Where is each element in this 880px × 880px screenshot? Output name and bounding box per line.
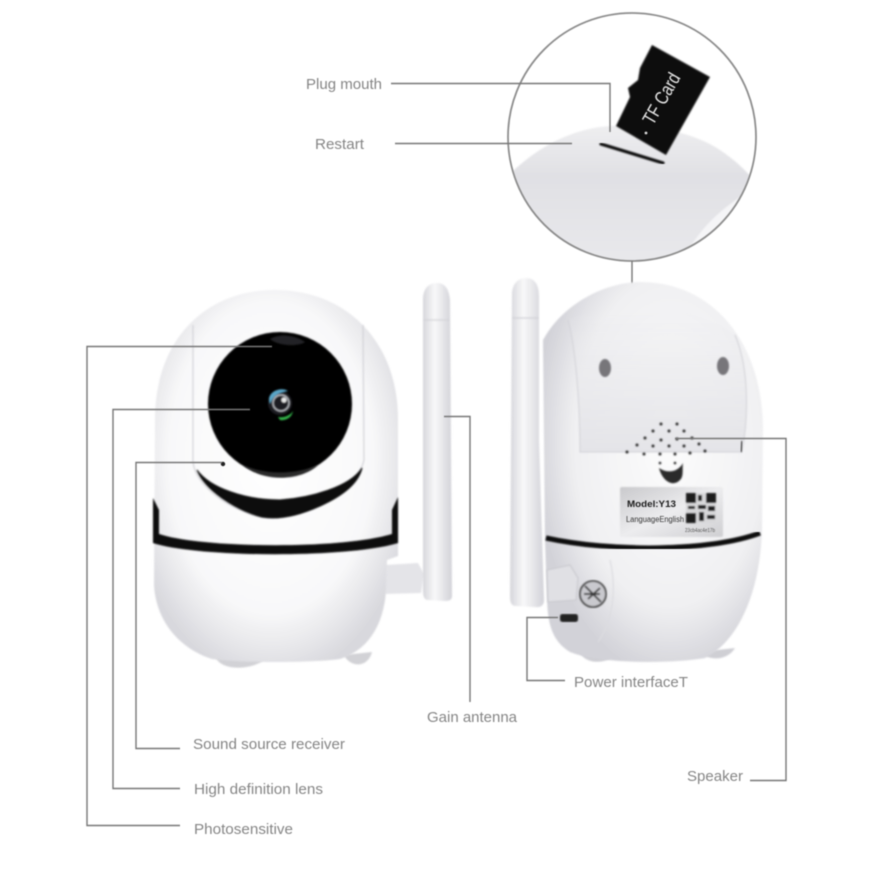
model label: [620, 487, 723, 537]
TF card: TF Card: [639, 70, 685, 128]
label: Photosensitive: Photosensitive: [194, 821, 293, 838]
mounting holes: [599, 357, 729, 377]
front antenna: [423, 283, 452, 601]
black lens disc: [208, 332, 352, 476]
inset dome surface: [512, 126, 752, 270]
label: High definition lens: High definition lens: [194, 781, 323, 798]
label: Sound source receiver: Sound source receiver: [193, 736, 345, 753]
card slot: [601, 144, 663, 163]
leader lines: [87, 84, 786, 826]
front stripe: [153, 497, 398, 554]
back stripe: [546, 533, 760, 548]
TF card: [616, 45, 710, 155]
label: Power interfaceT: Power interfaceT: [574, 674, 688, 691]
model label: 23cb4ac4e17b: [685, 528, 715, 534]
camera: front view: [153, 283, 452, 668]
recess black band: [197, 468, 362, 518]
rear antenna: [510, 278, 544, 607]
camera: back view: [510, 278, 763, 662]
feet: [215, 652, 372, 668]
USB power port: [560, 614, 578, 622]
front body shell: [154, 290, 398, 662]
speaker notch: [659, 463, 683, 483]
inset connector line: [631, 261, 633, 285]
label: Speaker: Speaker: [687, 768, 743, 785]
microphone hole: [221, 462, 225, 466]
label: Plug mouth: Plug mouth: [306, 76, 382, 93]
reset badge: [580, 581, 606, 607]
front head recess: [193, 325, 364, 518]
QR code: [686, 493, 716, 523]
panel dark edge: [741, 441, 742, 452]
back head panel: [568, 306, 746, 452]
inset: TF card slot detail: [508, 13, 756, 285]
infographic: camera parts diagram: [86, 12, 788, 835]
model label: Model:Y13: [627, 499, 676, 510]
back feet: [578, 648, 735, 662]
rear antenna connector: [547, 565, 578, 602]
model label: LanguageEnglish: [626, 515, 684, 524]
back body shell: [543, 282, 763, 662]
label: Gain antenna: Gain antenna: [427, 709, 518, 726]
label: Restart: Restart: [315, 136, 365, 153]
speaker grille: [626, 422, 706, 464]
lens: [268, 389, 293, 420]
inset circle outline: [508, 13, 756, 261]
base side seam: [598, 560, 613, 642]
antenna connector: [385, 563, 424, 594]
